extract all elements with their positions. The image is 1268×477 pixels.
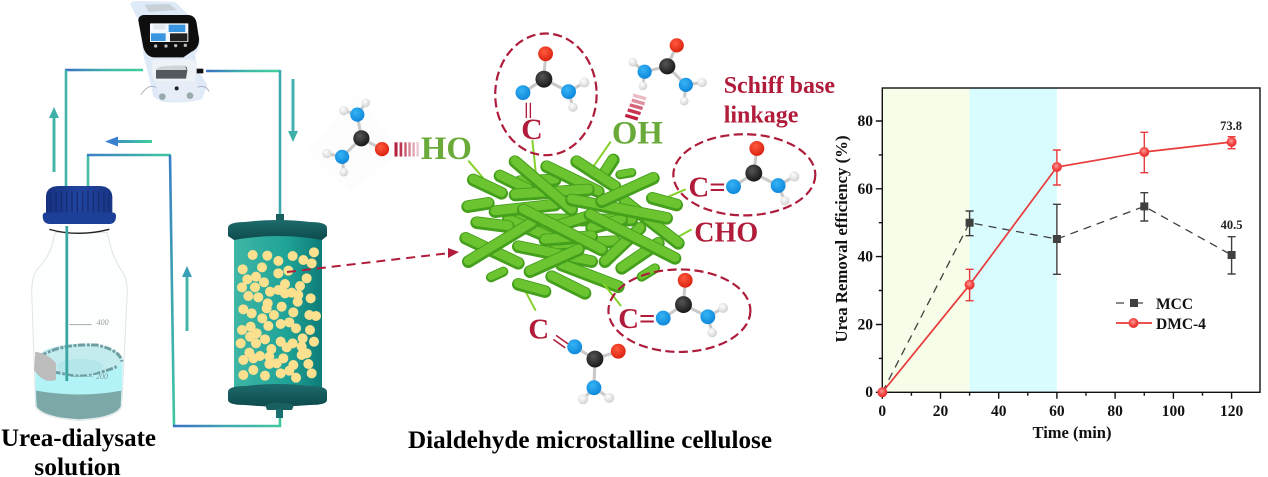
plot frame and ticks: [876, 88, 1260, 399]
arrow: up left: [49, 107, 59, 172]
shaded band: 0-30 min: [882, 88, 970, 392]
background fade patches: [307, 94, 401, 192]
y axis tick labels: 20: [858, 316, 873, 334]
ellipse: lower Schiff base: [608, 269, 750, 352]
x axis tick labels: 80: [1107, 403, 1123, 420]
filler beads: [236, 247, 321, 383]
y axis tick labels: 40: [858, 248, 873, 266]
dashed arrow: column to cellulose: [287, 248, 459, 272]
icon: glass bottle: [32, 229, 127, 421]
label: CHO: CHO: [694, 217, 758, 248]
arrow: left: [105, 136, 152, 146]
molecule: urea lower right: [656, 273, 728, 337]
pump control panel: [138, 15, 199, 57]
series: MCC: [882, 193, 1236, 392]
legend: MCC: [1156, 296, 1193, 313]
cellulose rods: [466, 140, 692, 311]
tube: pump to column: [206, 70, 280, 216]
x axis tick labels: 40: [991, 403, 1007, 420]
ellipse: right Schiff base: [673, 134, 815, 215]
molecule: urea right: [726, 141, 799, 206]
label: C bottom: [528, 313, 568, 348]
value label: 40.5: 40.5: [1221, 218, 1242, 232]
label: Schiff base linkage: Schiff base: [724, 73, 835, 99]
molecule: urea top right: [628, 38, 707, 106]
text: Urea-dialysate solution: Urea-dialysate: [1, 423, 156, 452]
mechanism illustration: [307, 34, 835, 404]
text: 400 mark: 400: [97, 318, 109, 327]
bottle neck ring: [49, 229, 109, 233]
series: DMC-4: [877, 132, 1237, 397]
x axis tick labels: 0: [878, 403, 886, 420]
y axis tick labels: [858, 113, 873, 401]
icon: bottle cap: [43, 186, 116, 224]
tube: bottle to pump: [65, 70, 143, 190]
hydrogen bond: top: [625, 95, 646, 119]
label: C= lower: C=: [618, 303, 655, 335]
value label: 73.8: 73.8: [1220, 119, 1242, 133]
pump head: [152, 59, 197, 82]
liquid: [35, 362, 123, 419]
text: Dialdehyde microstalline cellulose: Dialdehyde microstalline cellulose: [408, 425, 772, 454]
x axis tick labels: 20: [933, 403, 948, 420]
molecule: urea top: [516, 46, 590, 112]
packed column: [228, 214, 327, 418]
bottle label: [34, 352, 56, 381]
y axis tick labels: 80: [858, 113, 873, 130]
label: OH: OH: [612, 115, 663, 151]
text: Urea-dialysate solution: [1, 423, 156, 477]
molecule: urea left: [322, 98, 389, 176]
chart: urea removal efficiency: [832, 88, 1260, 442]
label: HO: HO: [421, 131, 472, 167]
y axis tick labels: 60: [858, 181, 873, 198]
x axis title: Time (min): [1033, 423, 1111, 442]
x axis tick labels: [878, 403, 1243, 420]
text: 200 mark: 200: [96, 372, 108, 381]
legend: DMC-4: [1156, 316, 1206, 333]
x axis tick labels: 60: [1049, 403, 1065, 420]
shaded band: 30-60 min: [970, 88, 1057, 392]
tube inside bottle: [65, 226, 68, 381]
y axis tick labels: 0: [865, 384, 873, 401]
molecule: urea bottom: [567, 339, 626, 404]
arrow: up right: [182, 266, 192, 331]
x axis tick labels: 120: [1220, 403, 1243, 420]
tube: column to bottle: [87, 155, 280, 426]
x axis tick labels: 100: [1162, 403, 1185, 420]
icon: peristaltic pump: [130, 1, 209, 102]
legend: [1116, 296, 1206, 333]
arrow: down: [288, 79, 298, 142]
label: C top: C: [521, 113, 543, 146]
y axis title: Urea Removal efficiency (%): [832, 135, 851, 343]
ellipse: top Schiff base: [495, 34, 597, 155]
label: C= right: C=: [689, 171, 726, 203]
label: Schiff base linkage: linkage: [724, 103, 799, 129]
label: Schiff base linkage: [724, 73, 835, 129]
label: C bottom: C: [528, 313, 549, 345]
hydrogen bond: left: [394, 142, 419, 157]
